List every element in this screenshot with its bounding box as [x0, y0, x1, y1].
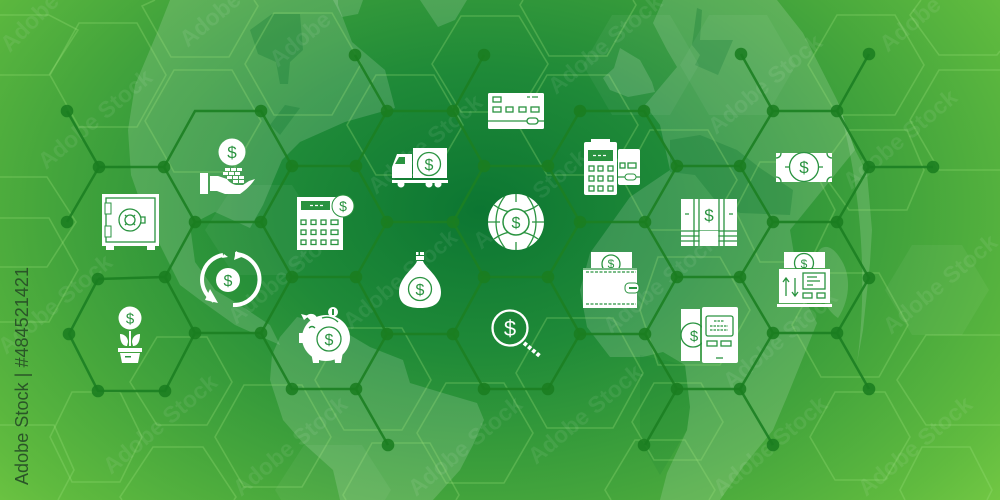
- icon: calculator with dollar coin: [297, 195, 354, 250]
- watermark text: Adobe Stock: [338, 224, 462, 334]
- watermark text: Adobe Stock: [223, 219, 347, 329]
- icon: circular arrows with dollar coin: [202, 251, 260, 305]
- icon: delivery truck: [392, 148, 448, 188]
- watermark text: Adobe Stock: [708, 391, 832, 500]
- world map globe: [128, 0, 872, 500]
- network nodes: [61, 48, 939, 451]
- icon: globe with dollar: [488, 194, 544, 250]
- icon: magnifying glass with dollar: [492, 310, 541, 357]
- icon: money plant in pot: [118, 306, 142, 363]
- icon: card terminal: [584, 139, 640, 195]
- watermark text: Adobe Stock: [403, 391, 527, 500]
- faint filled hexagons: [205, 15, 989, 500]
- watermark text: Adobe Stock: [703, 29, 827, 139]
- watermark text: Adobe: [264, 6, 336, 72]
- icon: stack of banknotes: [681, 199, 737, 246]
- icon: banknote: $: [799, 158, 809, 177]
- icon: circular arrows with dollar coin: $: [224, 273, 233, 290]
- icon: laptop with money transfer: $: [801, 257, 808, 271]
- icon: delivery truck: $: [425, 157, 434, 174]
- icon: piggy bank: [299, 307, 350, 363]
- icon: smartphone with banknote: $: [690, 328, 699, 345]
- icon: money bag: $: [416, 282, 425, 299]
- icon: wallet with banknotes: $: [608, 257, 615, 271]
- watermark text: Adobe Stock: [878, 229, 1000, 339]
- watermark text: Adobe Stock: [468, 144, 592, 254]
- side credit text: Adobe Stock | #484521421: [12, 267, 32, 485]
- watermark text: Adobe Stock: [363, 89, 487, 199]
- watermark text: Adobe Stock: [598, 229, 722, 339]
- icon: money bag: [399, 252, 441, 308]
- watermark text: Adobe Stock: [98, 369, 222, 479]
- watermark text: Adobe Stock: [33, 64, 157, 174]
- icon: laptop with money transfer: [777, 252, 832, 307]
- icon: stack of banknotes: $: [704, 206, 714, 225]
- icon: money plant in pot: $: [126, 310, 135, 328]
- watermark text: Adobe Stock: [228, 391, 352, 500]
- icon: credit card: [488, 93, 544, 129]
- icon: hand holding coin: $: [227, 143, 237, 162]
- watermark text: Adobe Stock: [718, 284, 842, 394]
- icon: hand holding coin: [200, 138, 255, 194]
- icon: magnifying glass with dollar: $: [504, 316, 516, 341]
- icon: safe: [102, 194, 159, 250]
- icon: smartphone with banknote: [681, 307, 738, 363]
- icon: wallet with banknotes: [583, 252, 639, 308]
- icon: banknote: [776, 152, 832, 182]
- icon: calculator with dollar coin: $: [339, 198, 347, 214]
- watermark text: Adobe Stock: [853, 391, 977, 500]
- icon: piggy bank: $: [325, 332, 334, 349]
- hexagon network lines: [67, 54, 933, 445]
- icon: globe with dollar: $: [512, 215, 521, 232]
- watermark text: Adobe Stock: [523, 359, 647, 469]
- watermark text: Adobe Stock: [838, 84, 962, 194]
